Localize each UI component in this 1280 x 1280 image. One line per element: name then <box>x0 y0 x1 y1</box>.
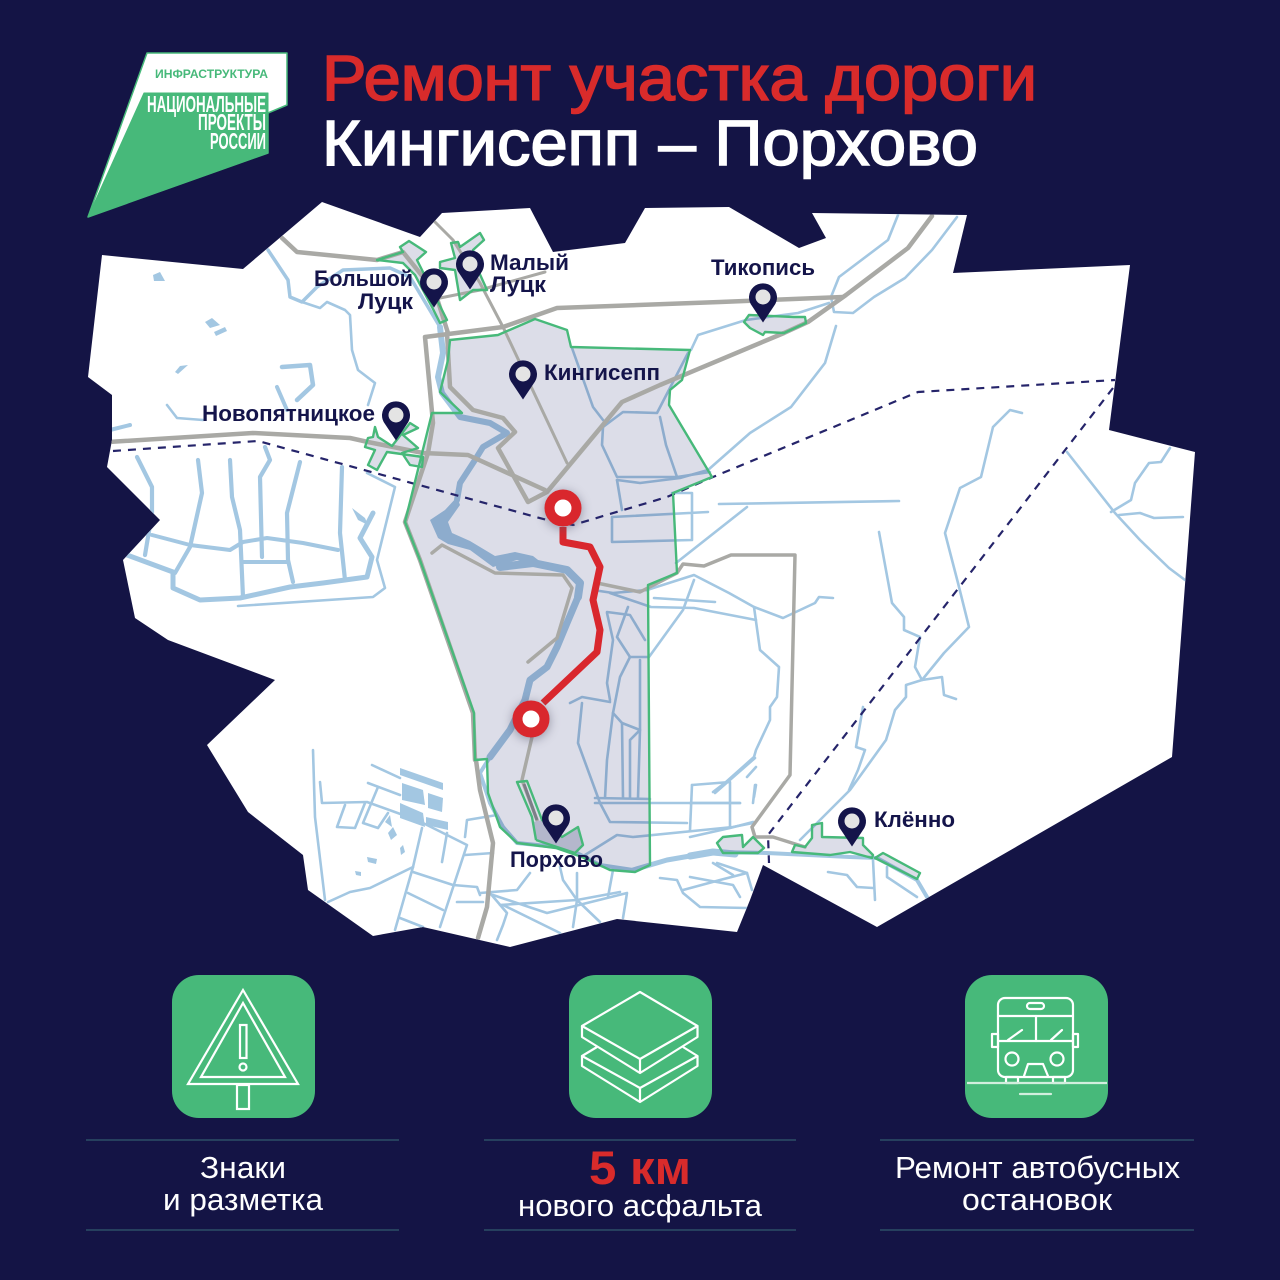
place labels: Порхово <box>510 847 603 872</box>
pin: Maly Luck <box>456 250 484 290</box>
route end marker <box>512 702 550 740</box>
caption: 5 km of new asphalt <box>484 1140 796 1230</box>
icon: warning sign <box>172 975 315 1118</box>
place labels: Большой <box>314 266 413 291</box>
caption: signs and markings: и разметка <box>163 1183 323 1217</box>
place labels: Луцк <box>358 289 414 314</box>
map background shape <box>88 202 1195 947</box>
caption: 5 km of new asphalt: нового асфальта <box>518 1189 762 1223</box>
streams and canals <box>110 215 1185 940</box>
pin: Novopyatnitskoe <box>382 401 410 440</box>
place labels: Луцк <box>490 272 547 297</box>
green city boundaries <box>365 233 920 879</box>
caption: 5 km of new asphalt: 5 км <box>589 1141 691 1194</box>
caption: bus stop repair: Ремонт автобусных <box>895 1151 1180 1185</box>
place labels: Клённо <box>874 807 955 832</box>
caption: signs and markings <box>86 1140 399 1230</box>
pin: Porkhovo <box>542 804 570 844</box>
Porkhovo district <box>517 781 583 853</box>
place labels: Тикопись <box>711 255 815 280</box>
caption: bus stop repair <box>880 1140 1194 1230</box>
pin: Tikopis <box>749 283 777 322</box>
caption: bus stop repair: остановок <box>962 1183 1113 1217</box>
logo: national projects infrastructure: РОССИИ <box>210 128 266 154</box>
title: Кингисепп – Порхово <box>322 107 978 179</box>
place labels: Новопятницкое <box>202 401 375 426</box>
pin: Kingisepp <box>509 360 537 400</box>
place labels <box>202 250 955 872</box>
village fills <box>365 233 920 879</box>
logo: national projects infrastructure: ПРОЕКТЫ <box>198 109 266 135</box>
icon: bus <box>965 975 1108 1118</box>
map <box>88 202 1195 947</box>
caption: signs and markings: Знаки <box>200 1151 286 1185</box>
roads <box>108 216 932 938</box>
logo: national projects infrastructure <box>88 53 287 217</box>
pin: Bolshoy Luck <box>420 268 448 308</box>
place labels: Кингисепп <box>544 360 660 385</box>
city area: Kingisepp <box>405 319 712 872</box>
route start marker <box>544 491 582 529</box>
main river <box>268 250 927 897</box>
place labels: Малый <box>490 250 569 275</box>
dashed power lines <box>113 380 1115 863</box>
pin: Klenno <box>838 807 866 846</box>
title <box>322 42 1037 179</box>
title: Ремонт участка дороги <box>322 42 1037 114</box>
ponds <box>153 272 448 876</box>
icon: asphalt layers <box>569 975 712 1118</box>
repair route <box>543 527 600 703</box>
logo: national projects infrastructure: НАЦИОНАЛЬНЫЕ <box>147 91 266 117</box>
logo: national projects infrastructure: ИНФРАСТРУКТУРА <box>155 69 268 81</box>
